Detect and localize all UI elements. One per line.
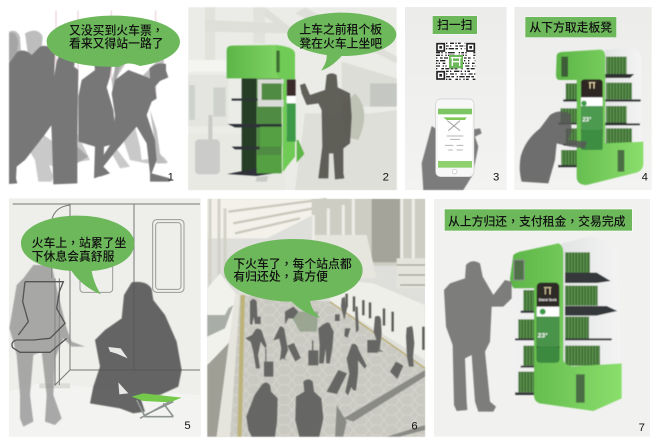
speech bubble: 火车上，站累了坐	[32, 236, 126, 250]
number 7: 7	[639, 422, 645, 434]
number 6: 6	[411, 421, 418, 433]
kiosk: 23°	[582, 117, 592, 123]
label	[432, 16, 477, 34]
QR code	[436, 43, 475, 80]
panel 5: resting on the train	[9, 198, 201, 437]
number 2: 2	[383, 172, 389, 184]
number 1: 1	[168, 172, 174, 184]
speech bubble	[47, 16, 180, 67]
panel 4: take stool from lower slot	[514, 7, 652, 190]
number 3: 3	[493, 172, 499, 184]
speech bubble: 下休息会真舒服	[32, 249, 115, 263]
station scene	[207, 199, 425, 437]
speech bubble	[287, 13, 396, 71]
speech bubble	[21, 216, 134, 294]
number 5: 5	[184, 420, 191, 432]
panel 7: return stool and pay	[434, 199, 650, 437]
label: 从下方取走板凳	[529, 21, 612, 35]
standing person silhouette	[9, 265, 85, 427]
crouching person silhouette	[520, 111, 587, 183]
foreground walking silhouettes	[9, 46, 170, 184]
speech bubble: 上车之前租个板	[299, 23, 382, 37]
crouching man silhouette	[90, 282, 182, 413]
label: 从上方归还，支付租金，交易完成	[448, 215, 626, 229]
panel 6: return at every station	[207, 199, 425, 437]
panel 3: scan QR code	[405, 7, 507, 190]
seat outline	[12, 282, 67, 352]
background crowd silhouettes	[9, 31, 168, 182]
kiosk: Stand Seek	[539, 298, 557, 302]
label	[444, 209, 632, 231]
man silhouette	[444, 261, 512, 412]
label: 扫一扫	[437, 18, 472, 32]
station background	[188, 7, 397, 190]
speech bubble	[224, 239, 363, 318]
traveller silhouettes	[245, 297, 414, 437]
panel 2: rent a stool at the kiosk	[188, 7, 397, 190]
speech bubble: 下火车了，每个站点都	[233, 257, 352, 271]
phone	[436, 99, 474, 177]
speech bubble: 看来又得站一路了	[69, 36, 164, 50]
hand silhouette	[422, 126, 482, 190]
panel 1: crowd without ticket	[9, 11, 180, 184]
folding stool	[132, 393, 182, 418]
kiosk: 23°	[538, 331, 548, 339]
speech bubble: 又没买到火车票，	[69, 23, 164, 37]
speech bubble: 凳在火车上坐吧	[299, 36, 382, 50]
kiosk	[227, 45, 304, 182]
speech bubble: 有归还处，真方便	[233, 269, 328, 283]
number 4: 4	[642, 172, 648, 184]
man silhouette	[300, 73, 352, 179]
label	[525, 17, 617, 38]
kiosk	[556, 47, 643, 185]
kiosk	[510, 236, 622, 411]
train interior	[9, 204, 200, 437]
